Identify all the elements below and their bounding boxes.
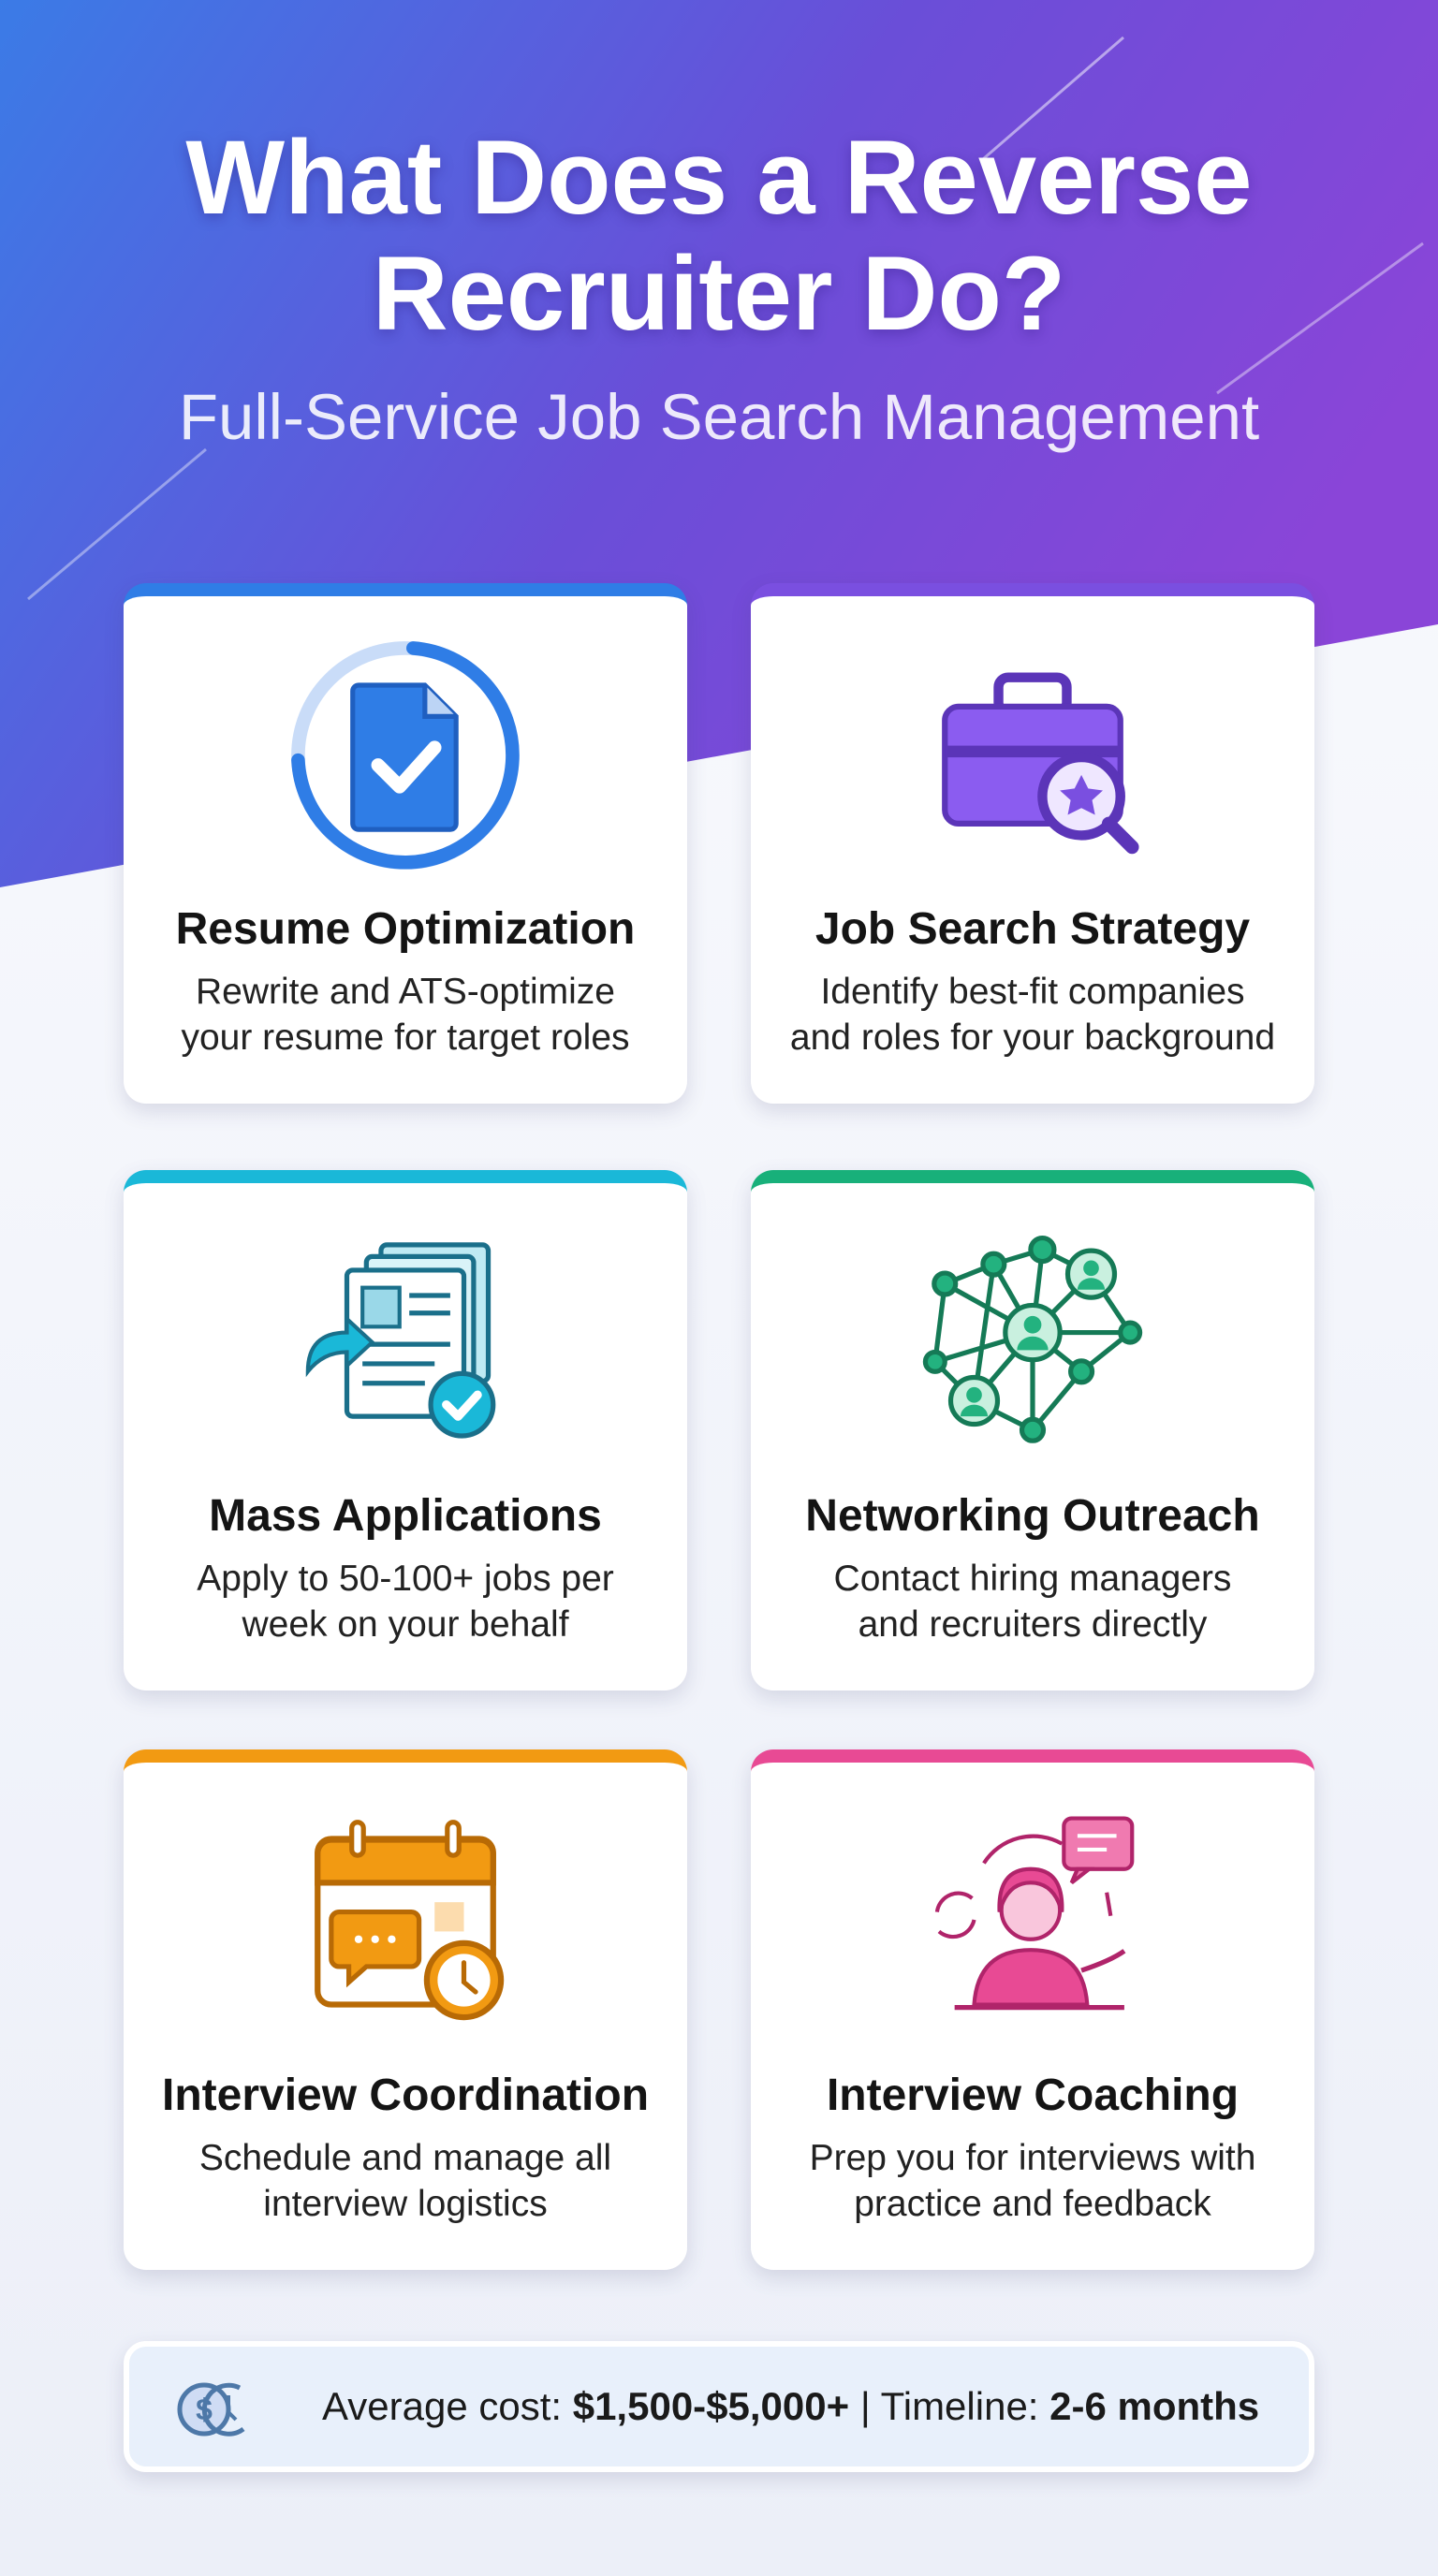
heading: Networking Outreach — [805, 1491, 1260, 1541]
text: Prep you for interviews with — [810, 2138, 1255, 2178]
text — [199, 2138, 611, 2224]
heading: Resume Optimization — [176, 904, 635, 954]
text: Identify best-fit companies — [820, 972, 1245, 1012]
icon: dollar clock — [178, 2383, 245, 2437]
title: What Does a Reverse — [185, 119, 1253, 236]
text — [197, 1559, 614, 1645]
panel: job search strategy — [751, 583, 1314, 1104]
text: and roles for your background — [790, 1017, 1275, 1058]
panel: mass applications — [124, 1170, 687, 1690]
title — [183, 119, 1253, 352]
icon: calendar clock — [315, 1820, 504, 2020]
icon: document check — [291, 641, 520, 870]
text — [810, 2138, 1255, 2224]
text: Average cost: $1,500-$5,000+ | Timeline: 2-6 months — [322, 2384, 1259, 2428]
icon: network — [923, 1236, 1142, 1443]
icon: coach with headset — [934, 1816, 1135, 2011]
icon: applications — [305, 1242, 496, 1439]
text: Contact hiring managers — [834, 1559, 1231, 1599]
footer: cost and timeline — [124, 2341, 1314, 2472]
title: Recruiter Do? — [373, 235, 1065, 352]
subtitle: Full-Service Job Search Management — [179, 381, 1259, 453]
heading: Job Search Strategy — [815, 904, 1250, 954]
text: Schedule and manage all — [199, 2138, 611, 2178]
text — [790, 972, 1275, 1058]
text: practice and feedback — [854, 2184, 1211, 2224]
panel: resume optimization — [124, 583, 687, 1104]
text: your resume for target roles — [181, 1017, 630, 1058]
icon: dollar clock: $ — [196, 2393, 213, 2426]
panel: interview coordination — [124, 1749, 687, 2270]
text: Apply to 50-100+ jobs per — [197, 1559, 614, 1599]
text: Rewrite and ATS-optimize — [196, 972, 615, 1012]
icon: briefcase search — [942, 672, 1139, 854]
heading: Interview Coordination — [162, 2071, 649, 2120]
heading: Mass Applications — [209, 1491, 602, 1541]
text: and recruiters directly — [858, 1604, 1207, 1645]
text: week on your behalf — [242, 1604, 569, 1645]
panel: interview coaching — [751, 1749, 1314, 2270]
text: interview logistics — [263, 2184, 548, 2224]
text — [181, 972, 630, 1058]
heading: Interview Coaching — [827, 2071, 1239, 2120]
panel: networking outreach — [751, 1170, 1314, 1690]
text — [834, 1559, 1231, 1645]
